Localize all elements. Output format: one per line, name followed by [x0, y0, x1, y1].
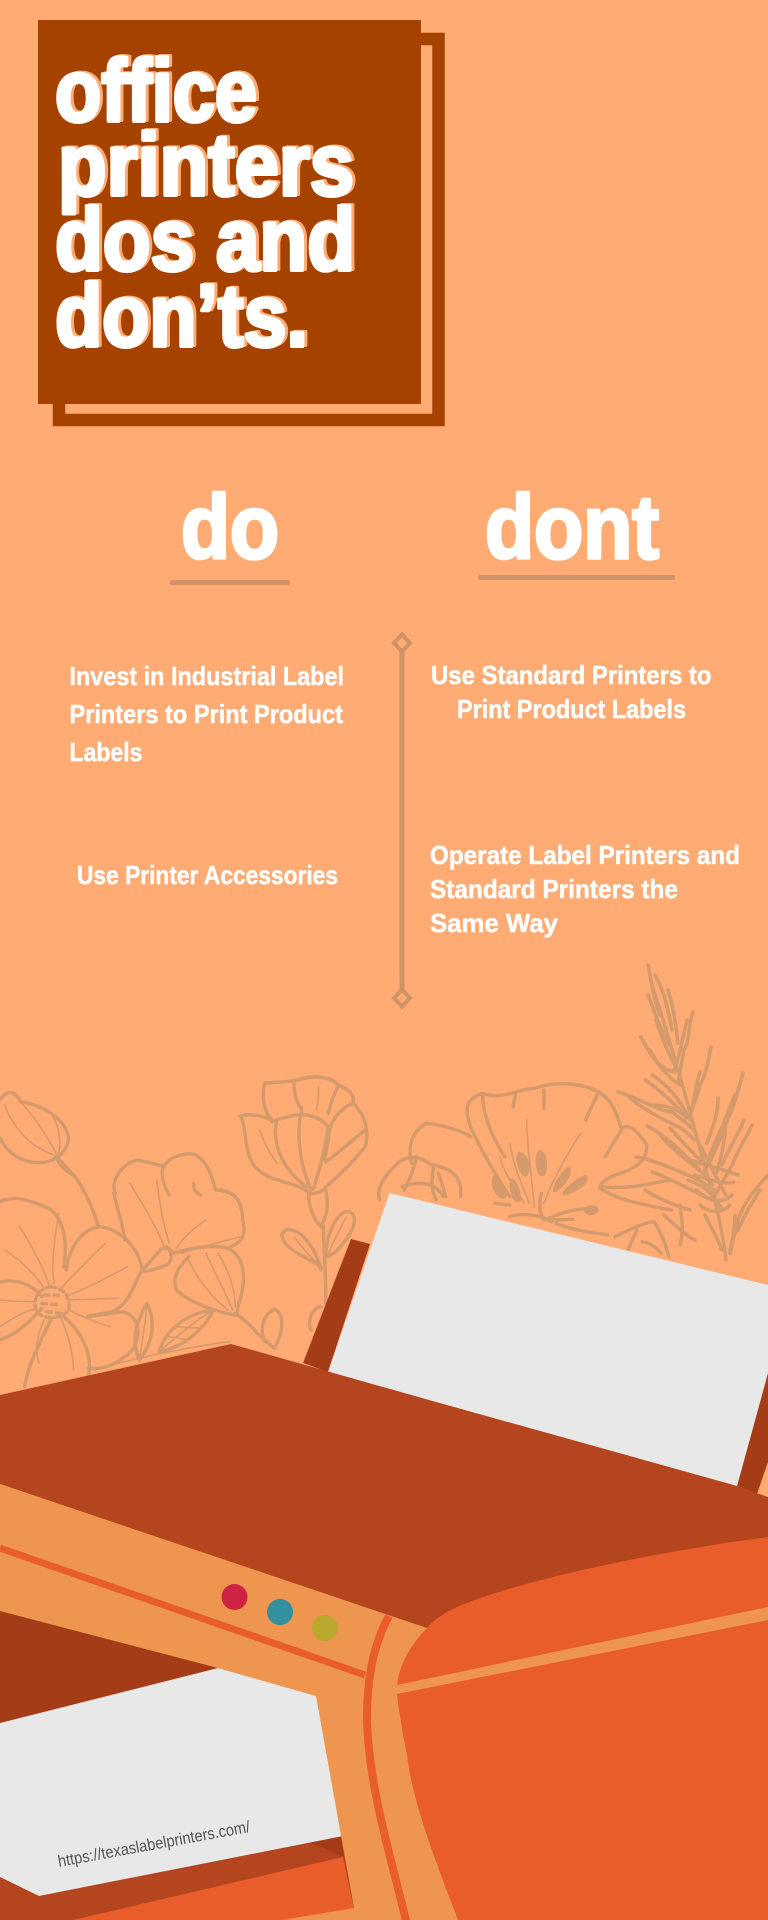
- printer lower tray: [0, 1830, 356, 1920]
- printer back support: [303, 1239, 370, 1372]
- printer front panel: [0, 1484, 470, 1920]
- text: dont item 1: [431, 660, 712, 724]
- icon: tulip flower: [240, 1077, 367, 1330]
- url text: https://texaslabelprinters.com/: [56, 1818, 252, 1871]
- printer output tray shadow: [0, 1605, 225, 1725]
- title: office: [55, 41, 257, 140]
- title: [55, 40, 358, 365]
- title: printers: [58, 115, 354, 214]
- text: do item 1: Labels: [70, 737, 142, 767]
- text: dont item 2: Same Way: [430, 908, 559, 938]
- text: do item 1: [70, 661, 344, 767]
- floral line art background: [0, 965, 768, 1387]
- text: dont item 2: [430, 840, 740, 938]
- printer output paper sheet: [0, 1668, 343, 1896]
- icon: grass plume: [618, 965, 768, 1260]
- title: don’ts.: [55, 266, 308, 365]
- printer body stripe: [397, 1607, 768, 1694]
- printer top paper sheet: [328, 1193, 768, 1486]
- printer illustration: [0, 1193, 768, 1920]
- text: do item 1: Printers to Print Product: [70, 699, 343, 729]
- title: dos and: [58, 189, 358, 288]
- icon: centre left flower: [114, 1154, 282, 1348]
- text: do item 1: Invest in Industrial Label: [70, 661, 344, 691]
- printer tray orange base: [73, 1857, 356, 1920]
- divider: [394, 634, 410, 1006]
- text: dont item 1: Use Standard Printers to: [431, 660, 712, 690]
- printer front stripe: [0, 1548, 365, 1675]
- title: printers: [61, 114, 357, 213]
- title: dos and: [55, 190, 355, 289]
- heading: dont: dont: [485, 478, 659, 578]
- text: dont item 1: Print Product Labels: [457, 694, 686, 724]
- indicator lights: [222, 1584, 338, 1641]
- title: office: [58, 40, 260, 139]
- text: dont item 2: Operate Label Printers and: [430, 840, 740, 870]
- icon: small leaves: [88, 1303, 230, 1370]
- title: don’ts.: [58, 265, 311, 364]
- printer orange body: [397, 1537, 768, 1920]
- printer right support: [737, 1373, 768, 1494]
- text: dont item 2: Standard Printers the: [430, 874, 678, 904]
- printer curved stripe: [367, 1616, 407, 1920]
- text: do item 2: Use Printer Accessories: [77, 860, 338, 890]
- panel: title block: [38, 20, 438, 420]
- icon: large left flower: [0, 1199, 142, 1387]
- icon: left flower bud: [0, 1093, 98, 1225]
- printer tray shade: [309, 1836, 344, 1857]
- printer lid: [0, 1344, 768, 1630]
- icon: poppy flower: [379, 1084, 671, 1257]
- heading: do: do: [181, 478, 279, 578]
